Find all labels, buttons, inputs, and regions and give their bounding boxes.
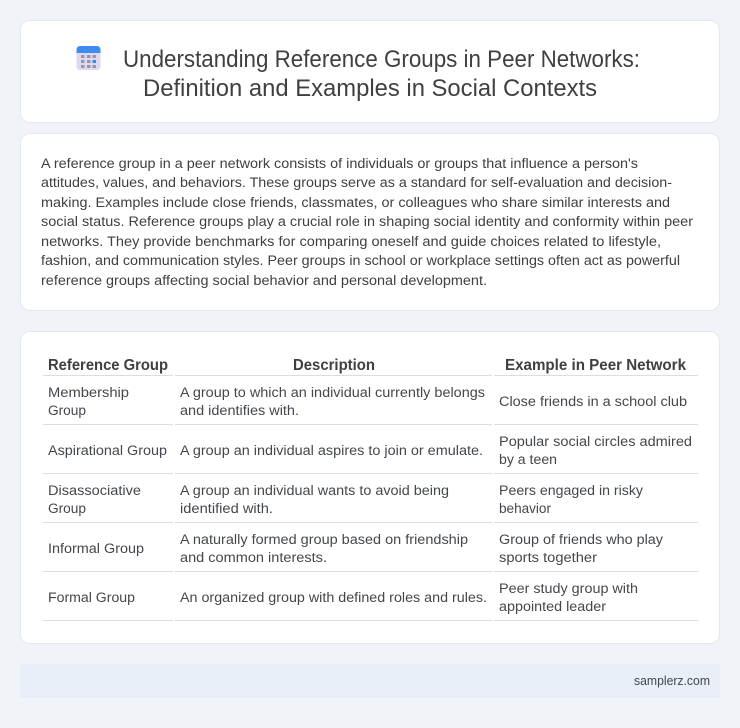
intro paragraph: A reference group in a peer network consists of individuals or groups that influence a person's	[41, 156, 638, 172]
footer text: samplerz.com	[634, 674, 710, 688]
row: informal group: Informal Group	[48, 541, 144, 557]
row: membership group: Group	[48, 403, 86, 419]
title: Understanding Reference Groups in Peer Networks:	[123, 46, 640, 73]
row: membership group: Membership	[48, 385, 129, 401]
intro paragraph: attitudes, values, and behaviors. These groups serve as a standard for self-evaluation and decision-	[41, 175, 672, 191]
row: formal group: appointed leader	[499, 599, 606, 615]
table card	[20, 331, 720, 644]
row: disassociative group: Group	[48, 501, 86, 517]
title: Definition and Examples in Social Contexts	[143, 75, 597, 102]
intro paragraph: networks. They provide benchmarks for comparing oneself and guide choices related to lifestyle,	[41, 234, 661, 250]
row: membership group: and identifies with.	[180, 403, 299, 419]
row: disassociative group: Peers engaged in risky	[499, 483, 644, 499]
table header: Description	[293, 357, 375, 374]
table header: Reference Group	[48, 357, 168, 374]
row: disassociative group: behavior	[499, 501, 551, 517]
row: membership group: Close friends in a school club	[499, 394, 687, 410]
icon: calendar	[76, 46, 100, 70]
title	[123, 46, 640, 102]
row: aspirational group: Popular social circles admired	[499, 434, 692, 450]
row: informal group: A naturally formed group based on friendship	[180, 532, 468, 548]
row: disassociative group: A group an individual wants to avoid being	[180, 483, 449, 499]
row: informal group: and common interests.	[180, 550, 327, 566]
intro card	[20, 133, 720, 311]
intro paragraph: social status. Reference groups play a crucial role in shaping social identity and conformity within peer	[41, 214, 693, 230]
row: membership group	[48, 385, 687, 419]
intro paragraph: reference groups affecting social behavior and personal development.	[41, 273, 487, 289]
row: disassociative group	[48, 483, 644, 517]
row: informal group: Group of friends who play	[499, 532, 664, 548]
row: aspirational group: Aspirational Group	[48, 443, 167, 459]
title card	[20, 20, 720, 123]
row: membership group: A group to which an individual currently belongs	[180, 385, 485, 401]
row: formal group: Peer study group with	[499, 581, 638, 597]
intro paragraph: making. Examples include close friends, classmates, or colleagues who share similar interests and	[41, 195, 670, 211]
row: disassociative group: identified with.	[180, 501, 273, 517]
row: formal group	[48, 581, 638, 615]
table	[43, 357, 698, 621]
intro paragraph: fashion, and communication styles. Peer groups in school or workplace settings often act as powerful	[41, 253, 680, 269]
row: disassociative group: Disassociative	[48, 483, 141, 499]
row: aspirational group	[48, 434, 692, 468]
row: informal group: sports together	[499, 550, 597, 566]
row: formal group: Formal Group	[48, 590, 135, 606]
table header	[48, 357, 686, 374]
footer bar	[20, 664, 720, 698]
row: formal group: An organized group with defined roles and rules.	[180, 590, 487, 606]
row: informal group	[48, 532, 664, 566]
row: aspirational group: A group an individual aspires to join or emulate.	[180, 443, 483, 459]
row: aspirational group: by a teen	[499, 452, 557, 468]
table header: Example in Peer Network	[505, 357, 686, 374]
intro paragraph	[41, 156, 693, 289]
